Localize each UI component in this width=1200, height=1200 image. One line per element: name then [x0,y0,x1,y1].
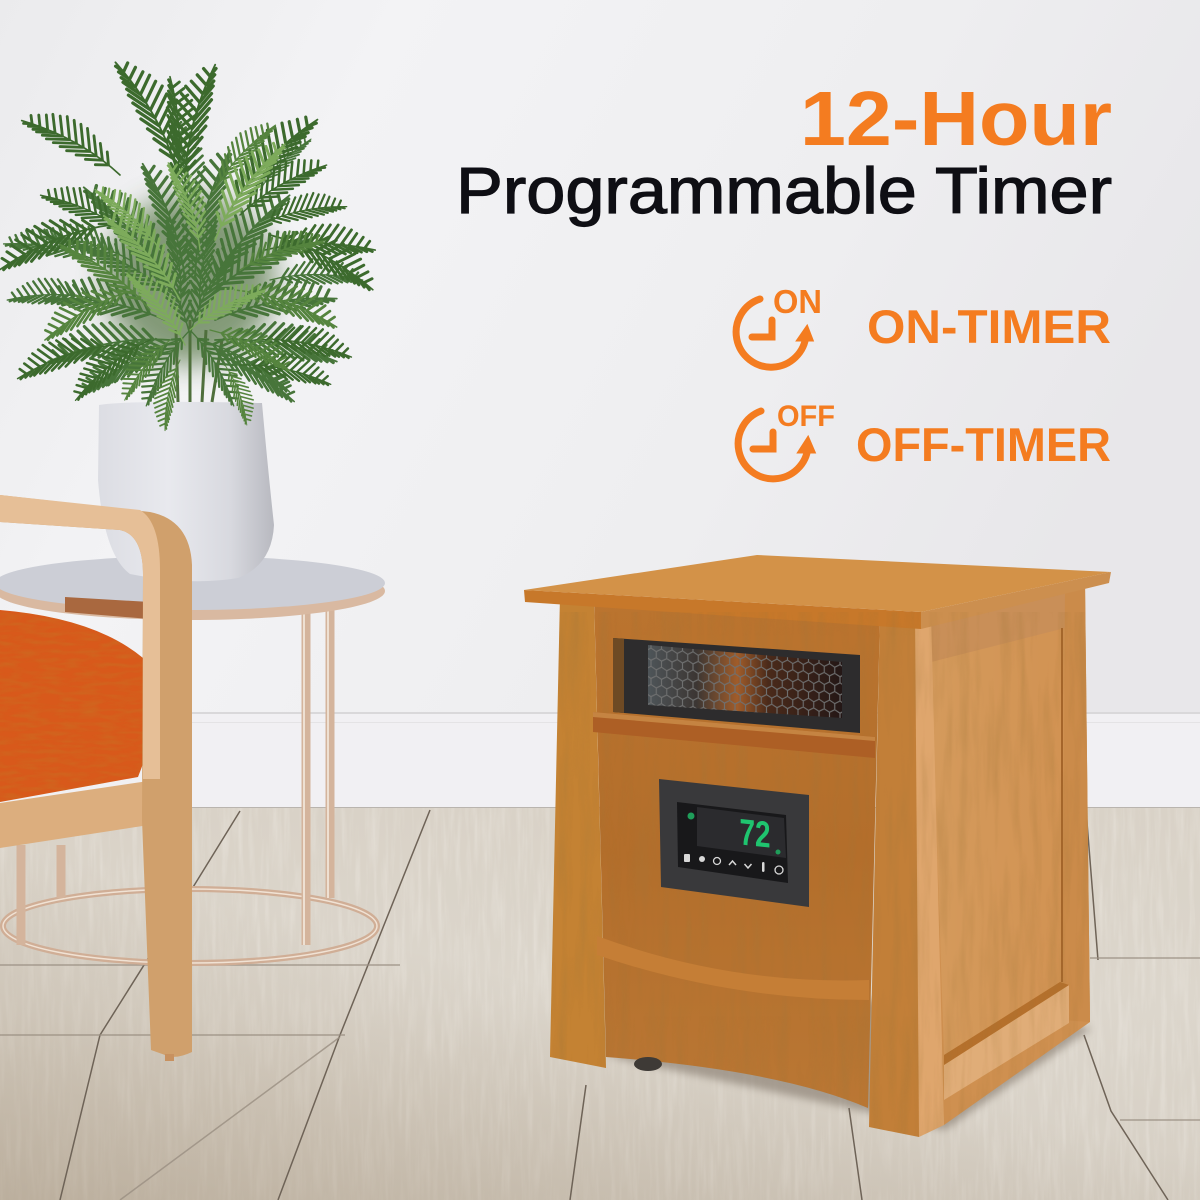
heater corner face [915,612,944,1137]
plant with palm fronds [0,51,383,431]
label: OFF-TIMER: OFF-TIMER [856,418,1111,471]
chair seat cushion [0,610,149,802]
heater side bottom rail [944,985,1069,1100]
bright fronds [95,129,285,355]
icon: off-timer clock [738,400,835,479]
background: wall [0,0,1200,812]
mid fronds [36,110,341,431]
chair arm and post [0,495,192,1057]
heater top edge [524,590,921,629]
chair frame [0,779,162,848]
wood grain [560,612,1088,1132]
heater upper grille [613,638,860,733]
heater control panel [659,779,809,907]
heater front panel [594,596,880,1108]
heater side top rail [931,592,1069,662]
armchair [0,495,192,1061]
title: 12-Hour: 12-Hour [800,76,1112,162]
heater front right leg [869,612,919,1137]
background: wooden floor [0,808,1200,1200]
icon: on-timer clock: ON [773,283,822,320]
heater side panel [919,578,1090,1125]
control buttons [684,854,783,874]
off-timer row [738,400,1111,479]
side table with gold legs [0,556,385,963]
inner fill fronds [3,118,363,406]
subtitle: Programmable Timer: Programmable Timer [456,154,1112,227]
icon: off-timer clock: OFF [777,400,835,433]
icon: on-timer clock [736,283,822,367]
display screen [677,802,788,883]
stems [176,320,222,402]
on-timer row [736,283,1111,367]
foliage mass [105,195,275,365]
label: ON-TIMER: ON-TIMER [867,300,1111,353]
background: skirting board [0,712,1200,810]
title [456,76,1112,227]
heater front left leg [550,596,606,1068]
plant pot [98,402,274,581]
heater upper rail [593,712,875,758]
heater top surface [524,555,1111,612]
fan indicator [688,812,694,820]
dark fronds [0,51,383,401]
heater caster [634,1057,662,1071]
temperature readout: 72 [740,810,770,856]
heater lower rail [597,936,869,1000]
heater cabinet [524,555,1112,1142]
heater floor shadow [606,1000,1092,1130]
heater side leg [1062,585,1090,1022]
